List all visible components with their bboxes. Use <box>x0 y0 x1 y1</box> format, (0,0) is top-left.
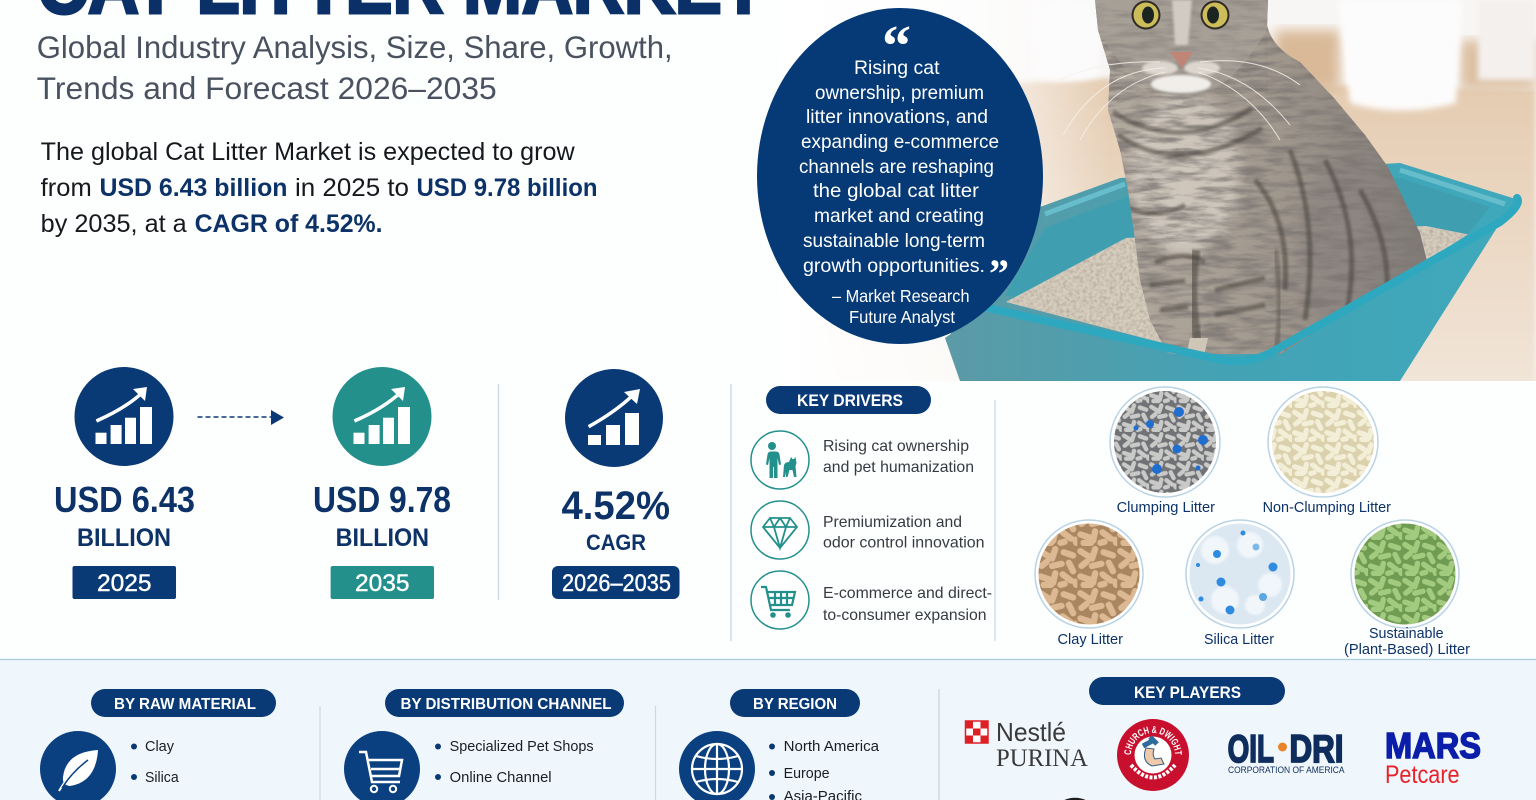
logo: Church & Dwight <box>1117 719 1189 791</box>
icon: person and pet <box>751 431 809 489</box>
stat: 2035 market size: 2035 <box>355 570 410 597</box>
list: raw materials: Silica <box>145 769 179 786</box>
quote attribution <box>832 286 970 327</box>
stat: 2025 market size: USD 6.43 <box>54 479 195 520</box>
litter type: clay: Clay Litter <box>1058 632 1123 648</box>
icon: leaf <box>40 731 116 800</box>
segment: by region: BY REGION <box>753 696 837 713</box>
stat: CAGR: 2026–2035 <box>562 570 671 597</box>
litter type: non-clumping <box>1263 387 1391 516</box>
litter box front rim <box>945 234 1470 381</box>
icon: diamond <box>751 501 809 559</box>
key players heading: KEY PLAYERS <box>1134 683 1241 702</box>
driver text: cat ownership: and pet humanization <box>823 459 974 476</box>
hero photo: cat in litter box <box>945 0 1536 381</box>
list: channels: Online Channel <box>450 769 552 786</box>
stat: 2025 market size: BILLION <box>77 524 171 552</box>
litter type: clay <box>1035 520 1143 648</box>
logo: Oil-Dri: CORPORATION OF AMERICA <box>1228 765 1344 775</box>
litter <box>1006 226 1468 342</box>
litter type: sustainable: Sustainable <box>1369 626 1444 642</box>
list: regions: Europe <box>784 765 830 782</box>
quote text: expanding e-commerce <box>801 131 999 153</box>
litter type: silica <box>1186 520 1294 648</box>
subtitle <box>37 29 673 106</box>
stat: 2035 market size: USD 9.78 <box>313 479 451 520</box>
quote text: ownership, premium <box>815 82 984 104</box>
list: raw materials: Clay <box>145 738 174 755</box>
driver text: premiumization <box>823 514 984 552</box>
quote attribution: – Market Research <box>832 286 970 306</box>
bottom panel background <box>0 659 1536 800</box>
key drivers heading <box>766 386 931 414</box>
opening quote mark: “ <box>882 13 911 78</box>
callout: analyst quote <box>757 8 1043 344</box>
quote text: the global cat litter <box>813 180 980 202</box>
closing quote mark: ” <box>989 251 1009 296</box>
litter type: sustainable: (Plant-Based) Litter <box>1344 642 1470 658</box>
driver text: cat ownership <box>823 438 974 476</box>
litter type: sustainable <box>1344 520 1470 658</box>
arrow: growth from 2025 to 2035 <box>198 410 284 425</box>
segment: by region <box>679 689 880 800</box>
cat face <box>1060 0 1300 140</box>
intro text: USD 6.43 billion <box>100 174 288 202</box>
panel: key players <box>964 677 1481 800</box>
intro text: USD 9.78 billion <box>416 174 598 202</box>
intro text: in 2025 to <box>295 174 409 202</box>
stat: 2025 market size <box>54 367 195 599</box>
subtitle: Global Industry Analysis, Size, Share, Growth, <box>37 29 673 65</box>
panel: key drivers <box>751 386 992 629</box>
stat: CAGR <box>552 369 680 599</box>
quote attribution: Future Analyst <box>849 307 955 327</box>
driver text: e-commerce <box>823 585 992 624</box>
driver text: e-commerce: E-commerce and direct- <box>823 585 992 602</box>
segment: by raw material <box>40 689 276 800</box>
quote text: litter innovations, and <box>806 106 988 128</box>
driver text: premiumization: odor control innovation <box>823 534 984 552</box>
key players heading <box>1089 677 1285 705</box>
stat: 2035 market size: BILLION <box>336 524 429 552</box>
logo: Mars Petcare: Petcare <box>1385 761 1460 789</box>
segment: by distribution channel <box>344 689 624 800</box>
stat: 2035 market size <box>313 367 451 599</box>
list: regions: North America <box>784 738 880 755</box>
intro text <box>41 138 597 238</box>
stat: CAGR: 4.52% <box>562 484 670 528</box>
logo: Nestlé Purina: Nestlé <box>996 717 1066 747</box>
background vases <box>1048 24 1536 114</box>
driver text: premiumization: Premiumization and <box>823 514 962 531</box>
litter box body <box>950 163 1519 381</box>
list: channels: Specialized Pet Shops <box>450 738 594 755</box>
quote text: growth opportunities. <box>803 255 985 277</box>
litter type: non-clumping: Non-Clumping Litter <box>1263 500 1391 516</box>
driver text: cat ownership: Rising cat ownership <box>823 438 969 455</box>
icon: cart <box>344 731 420 800</box>
logo: Oil-Dri <box>1228 728 1344 775</box>
logo: Nestlé Purina: PURINA <box>996 745 1088 772</box>
quote text: Rising cat <box>854 57 940 79</box>
logo: Mars Petcare <box>1385 725 1481 789</box>
list: channels <box>435 738 594 786</box>
intro text: The global Cat Litter Market is expected to grow <box>41 138 576 166</box>
logo: Mars Petcare: MARS <box>1385 725 1481 766</box>
quote text: channels are reshaping <box>799 156 994 178</box>
segment: by raw material: BY RAW MATERIAL <box>114 696 256 713</box>
quote text: sustainable long-term <box>803 230 985 252</box>
quote text: market and creating <box>814 205 984 227</box>
intro text: by 2035, at a <box>41 210 187 238</box>
litter type: silica: Silica Litter <box>1204 632 1274 648</box>
list: raw materials <box>131 738 179 786</box>
segment: by distribution channel: BY DISTRIBUTION CHANNEL <box>400 696 612 713</box>
logo: Oil-Dri: DRI <box>1290 728 1344 771</box>
key drivers heading: KEY DRIVERS <box>797 392 903 410</box>
icon: shopping cart <box>751 571 809 629</box>
litter type: clumping <box>1110 387 1220 516</box>
intro text: from <box>41 174 92 202</box>
logo: Church & Dwight: CHURCH & DWIGHT <box>1124 726 1182 755</box>
stat: 2025 market size: 2025 <box>97 570 152 597</box>
litter type: clumping: Clumping Litter <box>1117 500 1215 516</box>
list: regions <box>769 738 880 800</box>
quote text <box>799 57 999 277</box>
logo: partial black mark at bottom edge <box>1055 799 1095 800</box>
subtitle: Trends and Forecast 2026–2035 <box>37 70 497 106</box>
stat: CAGR: CAGR <box>586 530 646 555</box>
logo: Oil-Dri: OIL <box>1228 728 1274 771</box>
cat <box>1060 0 1430 356</box>
driver text: e-commerce: to-consumer expansion <box>823 607 986 624</box>
intro text: CAGR of 4.52%. <box>195 210 383 238</box>
icon: globe <box>679 731 755 800</box>
logo: Nestlé Purina <box>966 717 1088 772</box>
